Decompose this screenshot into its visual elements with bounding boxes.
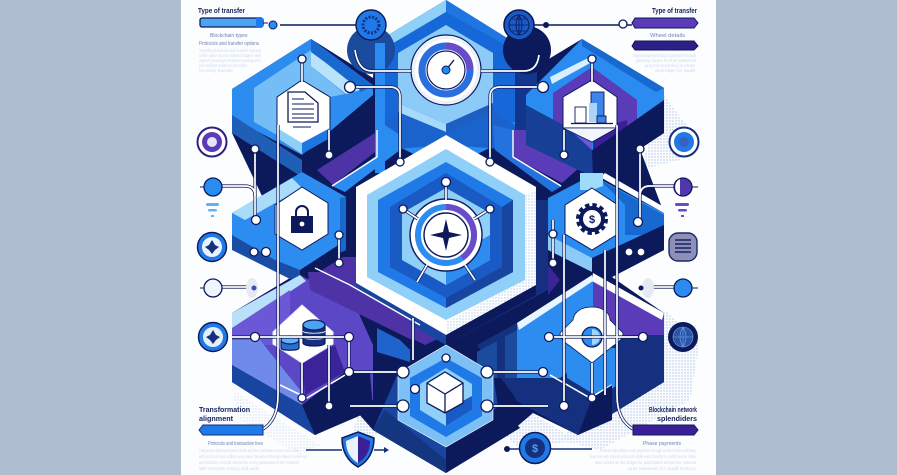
text block: bottom left: Transformation bbox=[199, 407, 250, 414]
text block: top right: Signed payment data is passed through bbox=[633, 53, 696, 58]
panel: side navy columns bbox=[332, 26, 562, 192]
panel: warehouse block bbox=[526, 39, 664, 177]
text block: top right: Type of transfer bbox=[652, 8, 697, 15]
gauge dial bbox=[411, 35, 481, 105]
text block: top left: for every transfer bbox=[199, 68, 233, 73]
panel: lock block bbox=[232, 172, 346, 284]
text block: top left: and verified nodes on the chain bbox=[199, 63, 247, 68]
text block: bottom left: with protocols that confirm every value movement through shared consensus bbox=[199, 454, 308, 459]
text block: bottom left bbox=[199, 407, 308, 471]
icon: buildings bbox=[571, 92, 613, 124]
icon: top left network badge bbox=[280, 10, 386, 40]
database hexagon bbox=[273, 305, 333, 363]
text block: top right: and kept for audit bbox=[655, 68, 696, 73]
text block: top left: settle value across shared ledgers with bbox=[199, 53, 261, 58]
text block: top left: Transfer protocols and network options bbox=[199, 48, 262, 53]
text block: top left: signed messages between participants bbox=[199, 58, 262, 63]
text block: bottom left: and transfer records stored for every participant in the network bbox=[199, 460, 300, 465]
text block: bottom right: and retained for audit history bbox=[628, 466, 697, 471]
badge: blue ring bbox=[670, 128, 698, 156]
panel: top hexagon with gauge bbox=[375, 0, 537, 170]
icon: padlock bbox=[291, 206, 313, 233]
badge: blue gear bbox=[198, 322, 228, 352]
badge: purple dot bbox=[674, 178, 698, 196]
text block: bottom left: Transaction alignment keeps blocks and fees consistent across each chain bbox=[199, 448, 299, 453]
panel: document block bbox=[232, 39, 375, 177]
text block: top right: process recorded on chain bbox=[645, 63, 695, 68]
text block: bottom right: Phase payments bbox=[643, 441, 682, 447]
icon: cube bbox=[427, 372, 463, 413]
icon: signal left bbox=[206, 203, 219, 217]
white panel bbox=[181, 0, 716, 475]
panel: lower hexagon with cube bbox=[373, 345, 520, 473]
compass dial bbox=[410, 199, 482, 271]
panel: central hexagon bbox=[356, 135, 536, 345]
text block: bottom left: alignment bbox=[199, 416, 234, 423]
central diagram base bbox=[232, 0, 664, 473]
text block: bottom left: with complete history and audit bbox=[199, 466, 260, 471]
badge: blue star bbox=[198, 232, 226, 262]
icon: signal right bbox=[675, 203, 689, 217]
text block: bottom right: splendiders bbox=[657, 416, 697, 423]
cloud hexagon bbox=[560, 307, 623, 363]
icon: cloud node bbox=[570, 327, 614, 347]
text block: bottom right: Network splendiders route payments through verified nodes and keep bbox=[600, 448, 696, 453]
panel: purple side bands bbox=[305, 130, 580, 345]
connection nodes bbox=[250, 55, 648, 412]
badge: purple ring bbox=[198, 128, 226, 156]
text block: top right bbox=[632, 8, 698, 73]
text block: bottom right: Blockchain network bbox=[649, 407, 697, 414]
badge: navy globe bbox=[668, 322, 698, 352]
text block: top left: Type of transfer bbox=[198, 8, 245, 15]
text block: bottom right: fees low with shared protocols while each transfer is confirmed on chain bbox=[590, 454, 696, 459]
badge: pale dot bbox=[200, 278, 258, 298]
badge: server lines bbox=[669, 233, 697, 261]
panel: lower-right blue block bbox=[477, 273, 664, 435]
text block: top left: Protocols and transfer options bbox=[199, 41, 259, 47]
badge: blue dot right bbox=[638, 278, 698, 298]
icon: document bbox=[288, 92, 318, 127]
icon: gear with dollar: $ bbox=[589, 214, 595, 226]
connector lines bbox=[222, 50, 675, 429]
lower white rim bbox=[356, 283, 446, 345]
panel: lower-left purple block bbox=[232, 268, 420, 435]
document hexagon bbox=[277, 80, 330, 154]
icon: top right globe badge bbox=[504, 10, 632, 40]
panel: gear block bbox=[548, 173, 664, 277]
icon: coin bbox=[504, 432, 592, 464]
text block: bottom right: then stored on the ledger for participants across the network bbox=[595, 460, 697, 465]
lock hexagon bbox=[275, 187, 328, 250]
text block: bottom right bbox=[590, 407, 698, 471]
text block: top right: gateway nodes for final settlement bbox=[636, 58, 697, 63]
icon: coin: $ bbox=[532, 443, 538, 455]
left side badges bbox=[198, 128, 258, 352]
halftone shadows bbox=[232, 95, 700, 455]
warehouse hexagon bbox=[563, 80, 617, 142]
icon: database coins bbox=[281, 320, 325, 350]
badge: blue dot bbox=[200, 178, 222, 196]
text block: bottom left: Protocols and transaction fees bbox=[208, 441, 263, 447]
text block: top right: Wheel details bbox=[650, 33, 686, 39]
text block: top left: Blockchain types bbox=[210, 33, 248, 39]
icon: shield bbox=[306, 432, 389, 467]
right side badges bbox=[638, 128, 698, 352]
text block: top left bbox=[198, 8, 277, 73]
